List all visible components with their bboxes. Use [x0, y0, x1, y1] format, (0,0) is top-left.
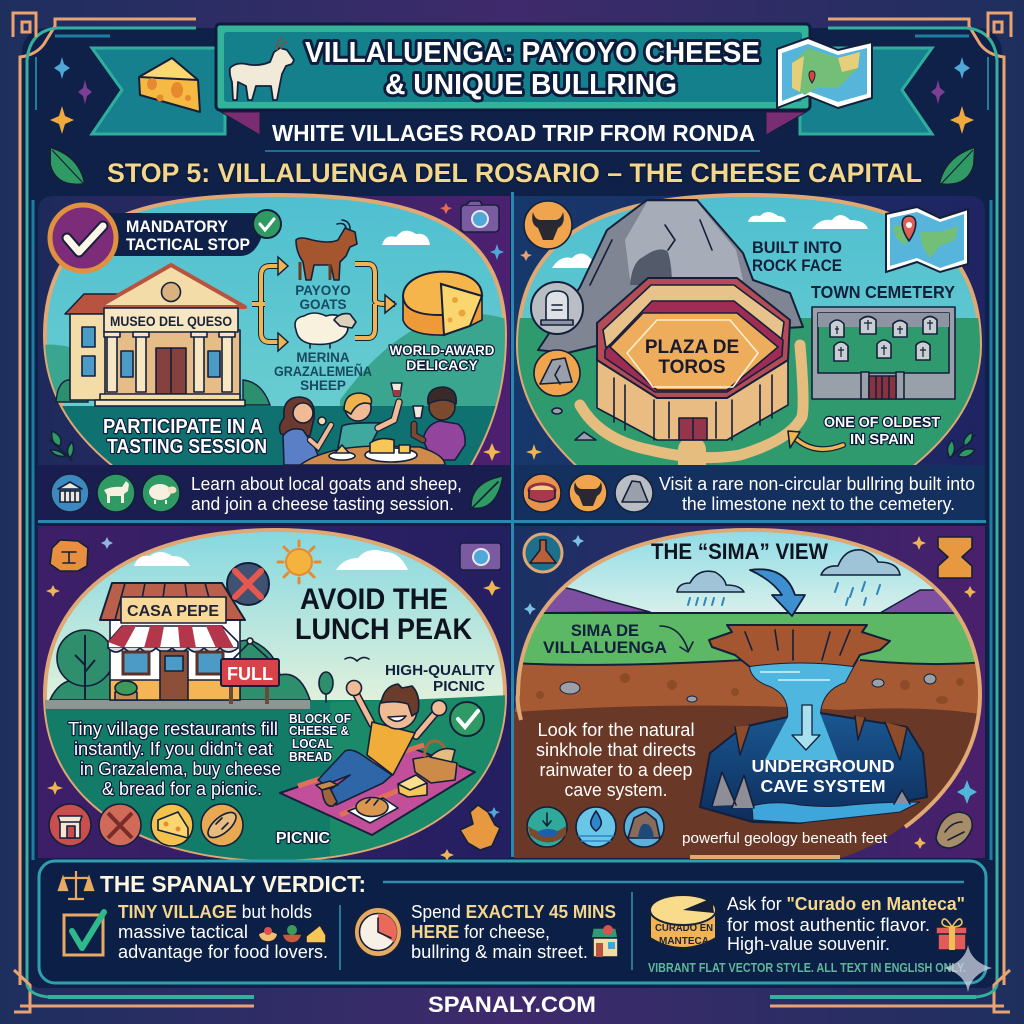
watermark star	[944, 945, 992, 992]
body text: restaurants fill: in Grazalema, buy cheese	[80, 758, 281, 779]
label: one of oldest in spain: ONE OF OLDEST	[824, 414, 940, 431]
illustration: plaza de toros arena: TOROS	[658, 357, 726, 378]
illustration: town cemetery	[812, 307, 955, 399]
panel 4 scene	[514, 530, 985, 860]
illustration: picnic blanket and person	[280, 680, 475, 835]
body text: restaurants fill: Tiny village restaurants fill	[68, 718, 278, 739]
heading: the sima view: THE “SIMA” VIEW	[651, 539, 828, 564]
title text: VILLALUENGA: PAYOYO CHEESE	[305, 37, 760, 69]
body text: restaurants fill	[68, 718, 281, 799]
sparkles beside header	[50, 57, 974, 134]
icon: sun	[278, 541, 320, 583]
title text	[305, 37, 760, 101]
verdict item: 45 mins: Spend EXACTLY 45 MINS	[411, 902, 616, 922]
badge: mandatory tactical stop: TACTICAL STOP	[126, 236, 250, 254]
label: block of cheese and local bread: BREAD	[289, 750, 332, 764]
verdict item: 45 mins	[354, 902, 618, 962]
heading: avoid the lunch peak	[295, 583, 472, 646]
heading: avoid the lunch peak: AVOID THE	[300, 583, 448, 616]
sparkles	[524, 535, 977, 849]
label: high-quality picnic	[385, 662, 495, 695]
label: high-quality picnic: PICNIC	[433, 678, 485, 695]
body text: sinkhole	[536, 719, 696, 800]
illustration: plaza de toros arena	[597, 278, 790, 440]
illustration: sand path	[580, 345, 803, 470]
verdict item: curado en manteca: Ask for "Curado en Manteca"	[727, 894, 965, 914]
panel 1 scene	[40, 195, 510, 466]
panel: avoid lunch peak	[38, 526, 510, 865]
icon: map of Iberia	[777, 38, 872, 108]
icon: leaves beside heading	[50, 147, 975, 185]
sign: full: FULL	[227, 664, 273, 684]
icon: no entry cross	[227, 563, 269, 605]
label: sima de villaluenga: SIMA DE	[571, 622, 639, 640]
icon: brown goat	[296, 220, 357, 280]
arrow to bullring	[788, 431, 843, 449]
sign: full	[221, 638, 279, 704]
illustration: restaurant casa pepe: CASA PEPE	[127, 603, 219, 620]
illustration: plaza de toros arena: PLAZA DE	[645, 337, 739, 358]
body text: sinkhole: rainwater to a deep	[540, 759, 692, 780]
subtitle: WHITE VILLAGES ROAD TRIP FROM RONDA	[272, 120, 755, 146]
caption bar: Learn about local goats and sheep,	[191, 474, 462, 494]
badge: mandatory tactical stop	[50, 205, 281, 271]
label: built into rock face	[752, 238, 842, 275]
label: picnic: PICNIC	[276, 830, 331, 847]
icon: clouds	[552, 212, 868, 268]
body text: sinkhole: Look for the natural	[538, 719, 694, 740]
label: built into rock face: ROCK FACE	[752, 256, 842, 275]
label: world-award delicacy: WORLD-AWARD	[390, 342, 494, 358]
illustration: rock face	[538, 200, 803, 353]
icons: bull, tomb and rock medallions	[524, 201, 596, 440]
icons: corner carvings	[50, 540, 501, 850]
footer: SPANALY.COM	[428, 992, 596, 1017]
panel 3 scene	[40, 530, 510, 865]
sparkles and sprig	[520, 250, 975, 460]
label: block of cheese and local bread: BLOCK OF	[289, 712, 351, 726]
verdict item: curado en manteca	[650, 894, 965, 954]
panel: sima view	[514, 526, 985, 860]
icon: camera	[461, 201, 499, 232]
icon: clouds	[382, 231, 430, 245]
label: merina grazalemena sheep: GRAZALEMEÑA	[274, 364, 372, 379]
caption bar: and join a cheese tasting session.	[191, 494, 454, 514]
label: world-award delicacy	[390, 342, 494, 373]
icon: leaf sprig	[50, 431, 74, 460]
icons: medallion row	[527, 807, 664, 847]
icon: sheep	[295, 313, 356, 348]
verdict item: curado en manteca: MANTECA	[659, 935, 709, 947]
label: participate in a tasting session: PARTICIPATE IN A	[103, 416, 263, 438]
sparkles	[440, 203, 504, 461]
illustration: sinkhole and cave: CAVE SYSTEM	[760, 776, 886, 796]
panel 2 scene	[515, 195, 985, 468]
arrows: milk to cheese	[252, 257, 396, 351]
caption bar: the limestone next to the cemetery.	[682, 494, 955, 514]
body text: restaurants fill: & bread for a picnic.	[102, 778, 262, 799]
body text: sinkhole: sinkhole that directs	[536, 739, 696, 760]
icon: museum building	[56, 265, 270, 406]
icon: clouds	[134, 550, 408, 570]
label: one of oldest in spain: IN SPAIN	[850, 431, 914, 448]
heading: avoid the lunch peak: LUNCH PEAK	[295, 613, 472, 646]
label: one of oldest in spain	[824, 414, 940, 448]
badge: mandatory tactical stop: MANDATORY	[126, 218, 228, 236]
icon: green check	[450, 702, 484, 736]
label: powerful geology: powerful geology beneath feet	[682, 831, 887, 847]
label: block of cheese and local bread	[289, 712, 351, 764]
illustration: sinkhole and cave	[700, 625, 927, 823]
label: merina grazalemena sheep	[274, 350, 372, 393]
verdict item: tiny village: TINY VILLAGE but holds	[118, 902, 312, 922]
label: sima de villaluenga	[543, 622, 693, 657]
verdict item: tiny village: massive tactical	[118, 922, 248, 942]
style note: VIBRANT FLAT VECTOR STYLE. ALL TEXT IN ENGLISH ONLY.	[648, 961, 966, 975]
title text: & UNIQUE BULLRING	[385, 69, 677, 101]
caption bar: Visit a rare non-circular bullring built into	[659, 474, 975, 494]
icon: scales	[59, 871, 93, 899]
stop heading: STOP 5: VILLALUENGA DEL ROSARIO – THE CHEESE CAPITAL	[107, 158, 922, 188]
panel: the spanaly verdict	[39, 861, 986, 983]
body text: restaurants fill: instantly. If you didn't eat	[74, 738, 273, 759]
arrow: down into sima	[750, 569, 805, 616]
label: sima de villaluenga: VILLALUENGA	[543, 639, 667, 657]
label: block of cheese and local bread: CHEESE &	[289, 724, 349, 738]
label: payoyo goats: GOATS	[300, 297, 346, 312]
label: merina grazalemena sheep: SHEEP	[300, 378, 346, 393]
label: built into rock face: BUILT INTO	[752, 238, 842, 257]
illustration: people tasting cheese	[280, 383, 465, 465]
label: block of cheese and local bread: LOCAL	[292, 737, 333, 751]
verdict item: curado en manteca: CURADO EN	[655, 922, 713, 934]
illustration: restaurant casa pepe	[57, 583, 245, 700]
icon: white goat	[230, 37, 294, 100]
verdict item: 45 mins: bullring & main street.	[411, 942, 588, 962]
body text: sinkhole: cave system.	[564, 779, 668, 800]
verdict item: tiny village: advantage for food lovers.	[118, 942, 328, 962]
panel: bullring	[514, 195, 985, 520]
label: payoyo goats	[295, 283, 351, 312]
verdict item: curado en manteca: High-value souvenir.	[727, 934, 890, 954]
label: merina grazalemena sheep: MERINA	[296, 350, 350, 365]
label: town cemetery: TOWN CEMETERY	[811, 282, 955, 302]
label: high-quality picnic: HIGH-QUALITY	[385, 662, 495, 679]
icons: corners	[524, 534, 972, 848]
sparkles	[46, 537, 501, 861]
label: participate in a tasting session: TASTING SESSION	[107, 436, 267, 458]
verdict item: curado en manteca: for most authentic flavor.	[727, 915, 930, 935]
icons: medallion row	[49, 804, 243, 846]
label: participate in a tasting session	[103, 416, 267, 458]
icon: cheese wedge	[139, 58, 200, 112]
label: payoyo goats: PAYOYO	[295, 283, 351, 298]
label: world-award delicacy: DELICACY	[406, 357, 478, 373]
icon: rain clouds	[677, 550, 900, 605]
title banner	[216, 24, 810, 110]
ribbon tails	[92, 48, 932, 152]
panel: museum and tasting	[38, 195, 510, 520]
illustration: sinkhole and cave: UNDERGROUND	[752, 756, 894, 776]
illustration: soil stones	[536, 673, 964, 704]
verdict item: tiny village	[64, 902, 328, 962]
caption bar	[38, 465, 510, 520]
verdict item: 45 mins: HERE for cheese,	[411, 922, 550, 942]
icon: gift box	[936, 919, 967, 950]
icon: map with pin	[886, 207, 968, 272]
caption bar	[514, 465, 985, 520]
icon: cheese wheel	[403, 272, 482, 335]
icon: museum building: MUSEO DEL QUESO	[110, 313, 232, 329]
verdict heading: THE SPANALY VERDICT:	[100, 871, 366, 897]
illustration: small tree and bird	[319, 657, 369, 702]
